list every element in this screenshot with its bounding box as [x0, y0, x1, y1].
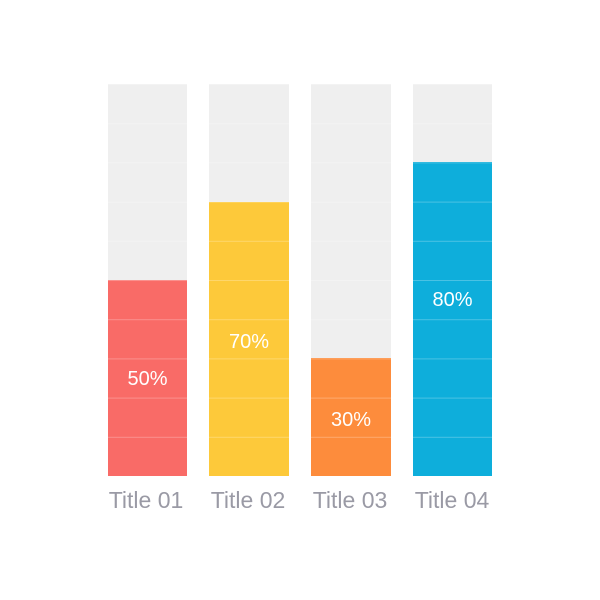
column 1: Title 01: [109, 487, 183, 513]
column 2: [209, 84, 289, 513]
column 3: Title 03: [313, 487, 387, 513]
column 4: Title 04: [415, 487, 489, 513]
column 4: [413, 84, 492, 513]
column 3: 30%: [331, 409, 371, 431]
column 1: 50%: [127, 368, 168, 390]
column 3: [311, 84, 391, 513]
column 2: 70%: [229, 331, 269, 353]
column 4: 80%: [432, 289, 473, 311]
column 2: Title 02: [211, 487, 285, 513]
column 1: [108, 84, 187, 513]
